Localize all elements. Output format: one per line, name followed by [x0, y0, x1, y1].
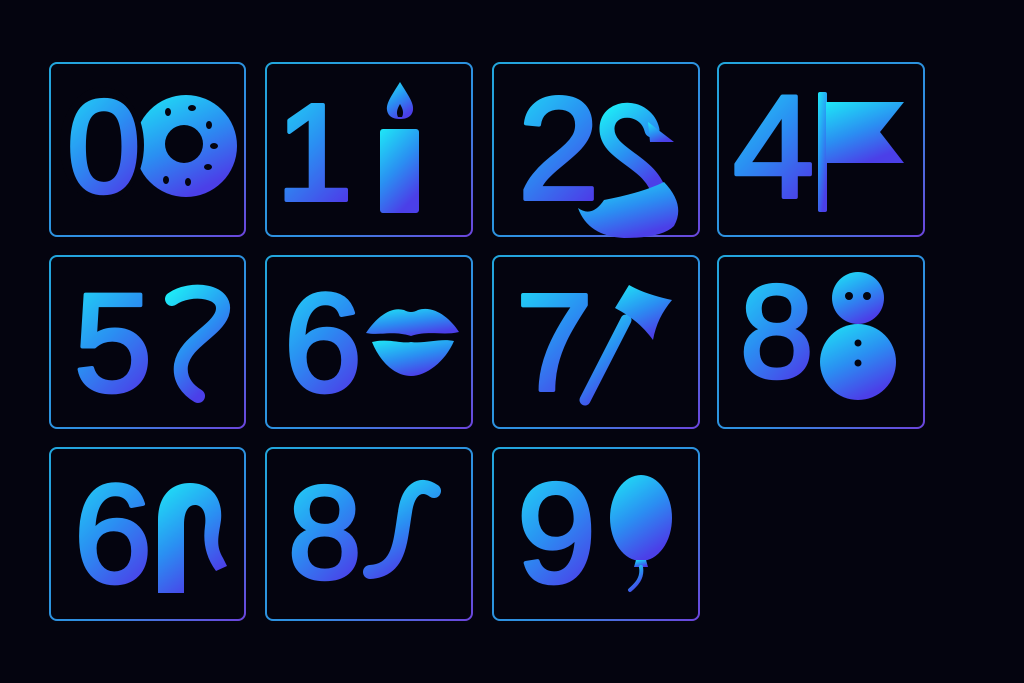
digit 0: 0 — [67, 73, 140, 220]
icon: lips — [366, 309, 459, 376]
digit 1: 1 — [276, 76, 353, 230]
icon: donut — [60, 87, 237, 203]
icon: swan — [578, 110, 678, 238]
digit 2: 2 — [518, 67, 599, 230]
icon: axe — [585, 285, 672, 400]
digit 6 row3: 6 — [74, 455, 152, 612]
icon: snowman — [820, 272, 896, 400]
icon: hook — [172, 292, 223, 396]
digit 9: 9 — [517, 454, 596, 613]
icon: s-curve — [370, 487, 434, 572]
icon: flag — [818, 92, 904, 212]
icon: arch — [158, 483, 227, 593]
digit 5: 5 — [74, 264, 152, 421]
digit 7: 7 — [516, 266, 593, 420]
digit 8 row3: 8 — [288, 459, 361, 606]
digit 4: 4 — [733, 65, 814, 228]
digit 6: 6 — [284, 264, 362, 421]
icon: candle — [380, 82, 419, 213]
icon: balloon — [610, 475, 672, 590]
digit 8: 8 — [740, 258, 813, 405]
